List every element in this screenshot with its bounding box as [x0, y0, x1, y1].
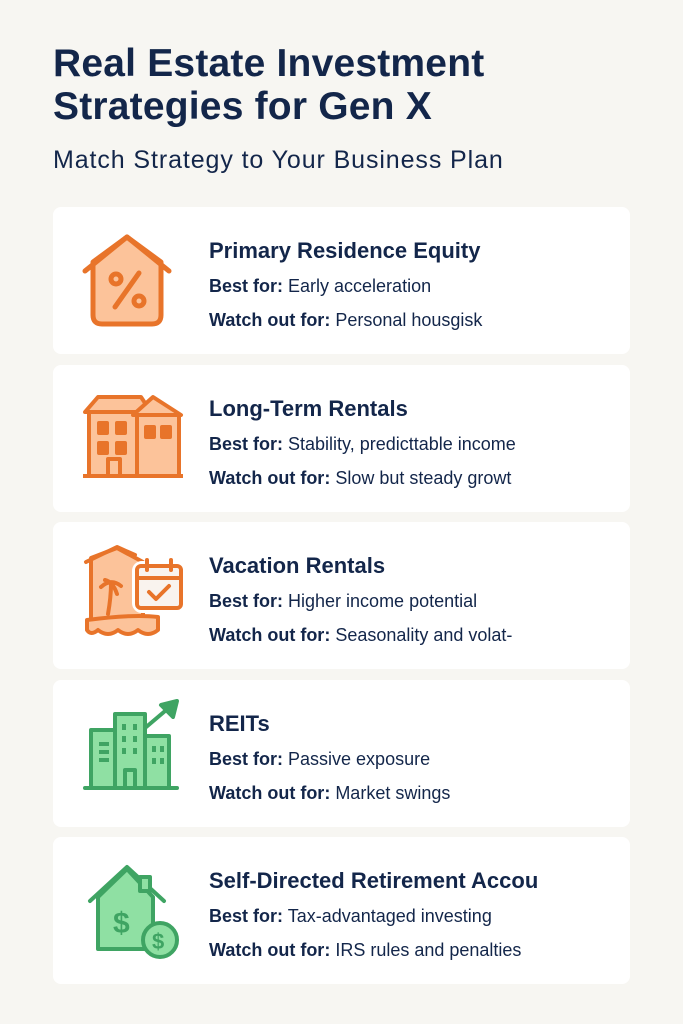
panel: primary residence equity [53, 207, 630, 354]
panel: long-term rentals [53, 365, 630, 512]
icon: house with dollar [88, 864, 179, 959]
watch out: Watch out for: IRS rules and penalties [209, 940, 521, 960]
title: Strategies for Gen X [53, 85, 432, 128]
best for: Best for: Stability, predicttable income [209, 434, 516, 454]
best for: Best for: Tax-advantaged investing [209, 906, 492, 926]
title [53, 42, 484, 128]
heading: Vacation Rentals [209, 553, 385, 578]
best for: Best for: Early acceleration [209, 276, 431, 296]
icon: house with percent [82, 234, 172, 326]
subtitle: Match Strategy to Your Business Plan [53, 146, 504, 174]
panel: vacation rentals [53, 522, 630, 669]
panel: REITs [53, 680, 630, 827]
watch out: Watch out for: Personal housgisk [209, 310, 482, 330]
heading: Primary Residence Equity [209, 238, 480, 263]
best for: Best for: Higher income potential [209, 591, 477, 611]
watch out: Watch out for: Market swings [209, 783, 450, 803]
best for: Best for: Passive exposure [209, 749, 430, 769]
panel: self-directed retirement [53, 837, 630, 984]
icon: house with dollar: $ [113, 907, 130, 940]
watch out: Watch out for: Seasonality and volat- [209, 625, 512, 645]
icon: townhouse [83, 395, 184, 478]
heading: Long-Term Rentals [209, 396, 408, 421]
watch out: Watch out for: Slow but steady growt [209, 468, 511, 488]
icon: house with dollar: $ [152, 929, 164, 954]
heading: REITs [209, 711, 270, 736]
icon: buildings with arrow [83, 699, 179, 790]
title: Real Estate Investment [53, 42, 484, 85]
icon: beach house with calendar [84, 545, 183, 636]
heading: Self-Directed Retirement Accou [209, 868, 538, 893]
